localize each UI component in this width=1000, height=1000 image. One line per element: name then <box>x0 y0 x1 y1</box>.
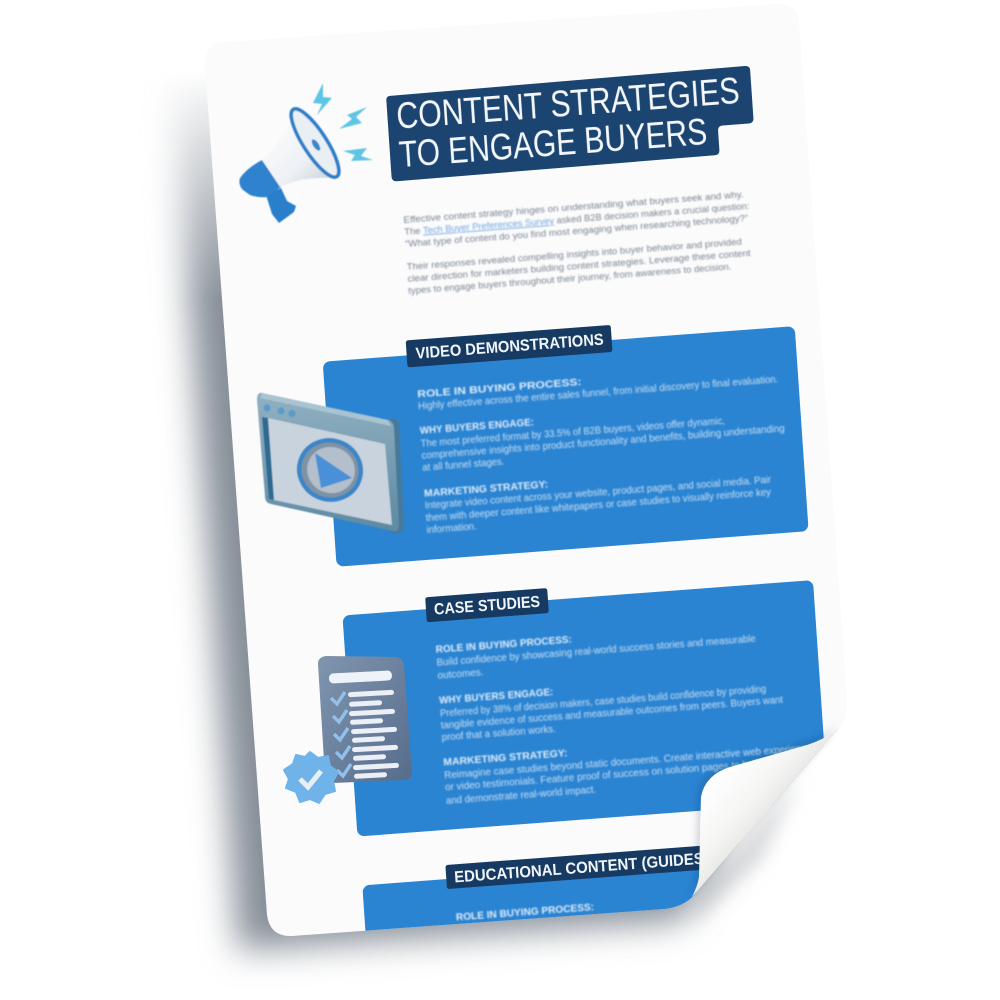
icon: video window <box>257 393 404 534</box>
case studies panel body text: Preferred by 38% of decision makers, case studies build confidence by providing <box>440 684 767 720</box>
play button face <box>301 440 361 500</box>
title text: CONTENT STRATEGIES <box>395 69 741 137</box>
case studies panel body text <box>435 634 806 805</box>
case studies panel body text: Reimagine case studies beyond static documents. Create interactive web experiences <box>444 743 817 782</box>
intro text: types to engage buyers throughout their journey, from awareness to decision. <box>408 262 732 297</box>
video panel body text: ROLE IN BUYING PROCESS: <box>417 376 582 400</box>
title text: TO ENGAGE BUYERS <box>398 110 708 175</box>
window top highlight <box>260 393 391 426</box>
page curl <box>692 727 840 897</box>
window frame <box>257 393 399 531</box>
heading tag: case studies: CASE STUDIES <box>433 593 541 619</box>
window screen <box>268 418 392 525</box>
badge check <box>300 771 321 787</box>
window inner shadow <box>262 417 275 500</box>
icon: megaphone <box>239 83 373 223</box>
video panel body text: WHY BUYERS ENGAGE: <box>419 416 534 437</box>
window dots <box>263 404 296 417</box>
case studies panel body text: Build confidence by showcasing real-world success stories and measurable <box>436 634 756 669</box>
lightning bolts <box>313 83 373 161</box>
panel: case studies <box>342 568 828 837</box>
megaphone rim <box>284 103 346 183</box>
video panel body text: information. <box>426 522 477 536</box>
paper shadow: under curl <box>690 775 800 925</box>
intro text: “What type of content do you find most engaging when researching technology?” <box>405 213 749 250</box>
video panel body text: comprehensive insights into product functionality and benefits, building understanding <box>421 423 785 462</box>
video panel body text: The most preferred format by 33.5% of B2B buyers, videos offer dynamic, <box>420 416 725 450</box>
intro text <box>403 189 754 297</box>
title banner <box>386 66 756 182</box>
case studies panel body text: outcomes. <box>437 667 484 682</box>
megaphone handle <box>266 188 296 223</box>
intro text: The Tech Buyer Preferences Survey asked B2B decision makers a crucial question: <box>404 201 750 238</box>
megaphone center <box>310 138 322 152</box>
intro text: Their responses revealed compelling insights into buyer behavior and provided <box>406 237 742 273</box>
educational panel body text: ROLE IN BUYING PROCESS: <box>456 901 594 924</box>
paper sheet <box>208 66 824 936</box>
panel: educational content <box>362 843 739 931</box>
video panel body text: at all funnel stages. <box>422 457 505 474</box>
video panel body text <box>416 375 786 534</box>
video panel body text: Highly effective across the entire sales funnel, from initial discovery to final evaluation. <box>418 374 779 412</box>
paper shadow: left and bottom <box>172 60 720 950</box>
title text <box>398 77 739 167</box>
megaphone blue neck <box>239 160 281 197</box>
case studies panel body text: and demonstrate real-world impact. <box>446 784 596 807</box>
checklist card <box>318 656 412 783</box>
heading tag: video demonstrations: VIDEO DEMONSTRATIONS <box>415 331 605 363</box>
video panel body text: MARKETING STRATEGY: <box>424 478 549 500</box>
intro text: Effective content strategy hinges on understanding what buyers seek and why. <box>403 189 744 226</box>
checklist ticks <box>331 692 351 776</box>
checklist lines <box>348 690 399 779</box>
case studies panel body text: ROLE IN BUYING PROCESS: <box>435 633 572 656</box>
panel: video demonstrations <box>322 311 809 567</box>
case studies panel body text: MARKETING STRATEGY: <box>443 747 568 769</box>
video panel body text: them with deeper content like whitepapers or case studies to visually reinforce key <box>425 487 771 524</box>
play triangle <box>315 453 352 488</box>
case studies panel body text: proof that a solution works. <box>441 724 556 744</box>
intro text: clear direction for marketers building content strategies. Leverage these content <box>407 248 751 285</box>
case studies panel body text: WHY BUYERS ENGAGE: <box>439 686 554 707</box>
icon: checklist with badge <box>284 656 412 803</box>
checklist title bar <box>329 670 392 684</box>
heading tag: educational content: EDUCATIONAL CONTENT (GUIDES & EBOOKS) <box>454 843 793 886</box>
case studies panel body text: or video testimonials. Feature proof of success on solution pages to build trust <box>445 757 786 794</box>
megaphone white cone <box>262 115 336 187</box>
video panel body text: Integrate video content across your website, product pages, and social media. Pair <box>425 475 772 512</box>
case studies panel body text: tangible evidence of success and measurable outcomes from peers. Buyers want <box>441 695 784 732</box>
verified badge <box>284 752 338 803</box>
window side depth <box>390 418 404 534</box>
play button ring <box>291 432 369 508</box>
